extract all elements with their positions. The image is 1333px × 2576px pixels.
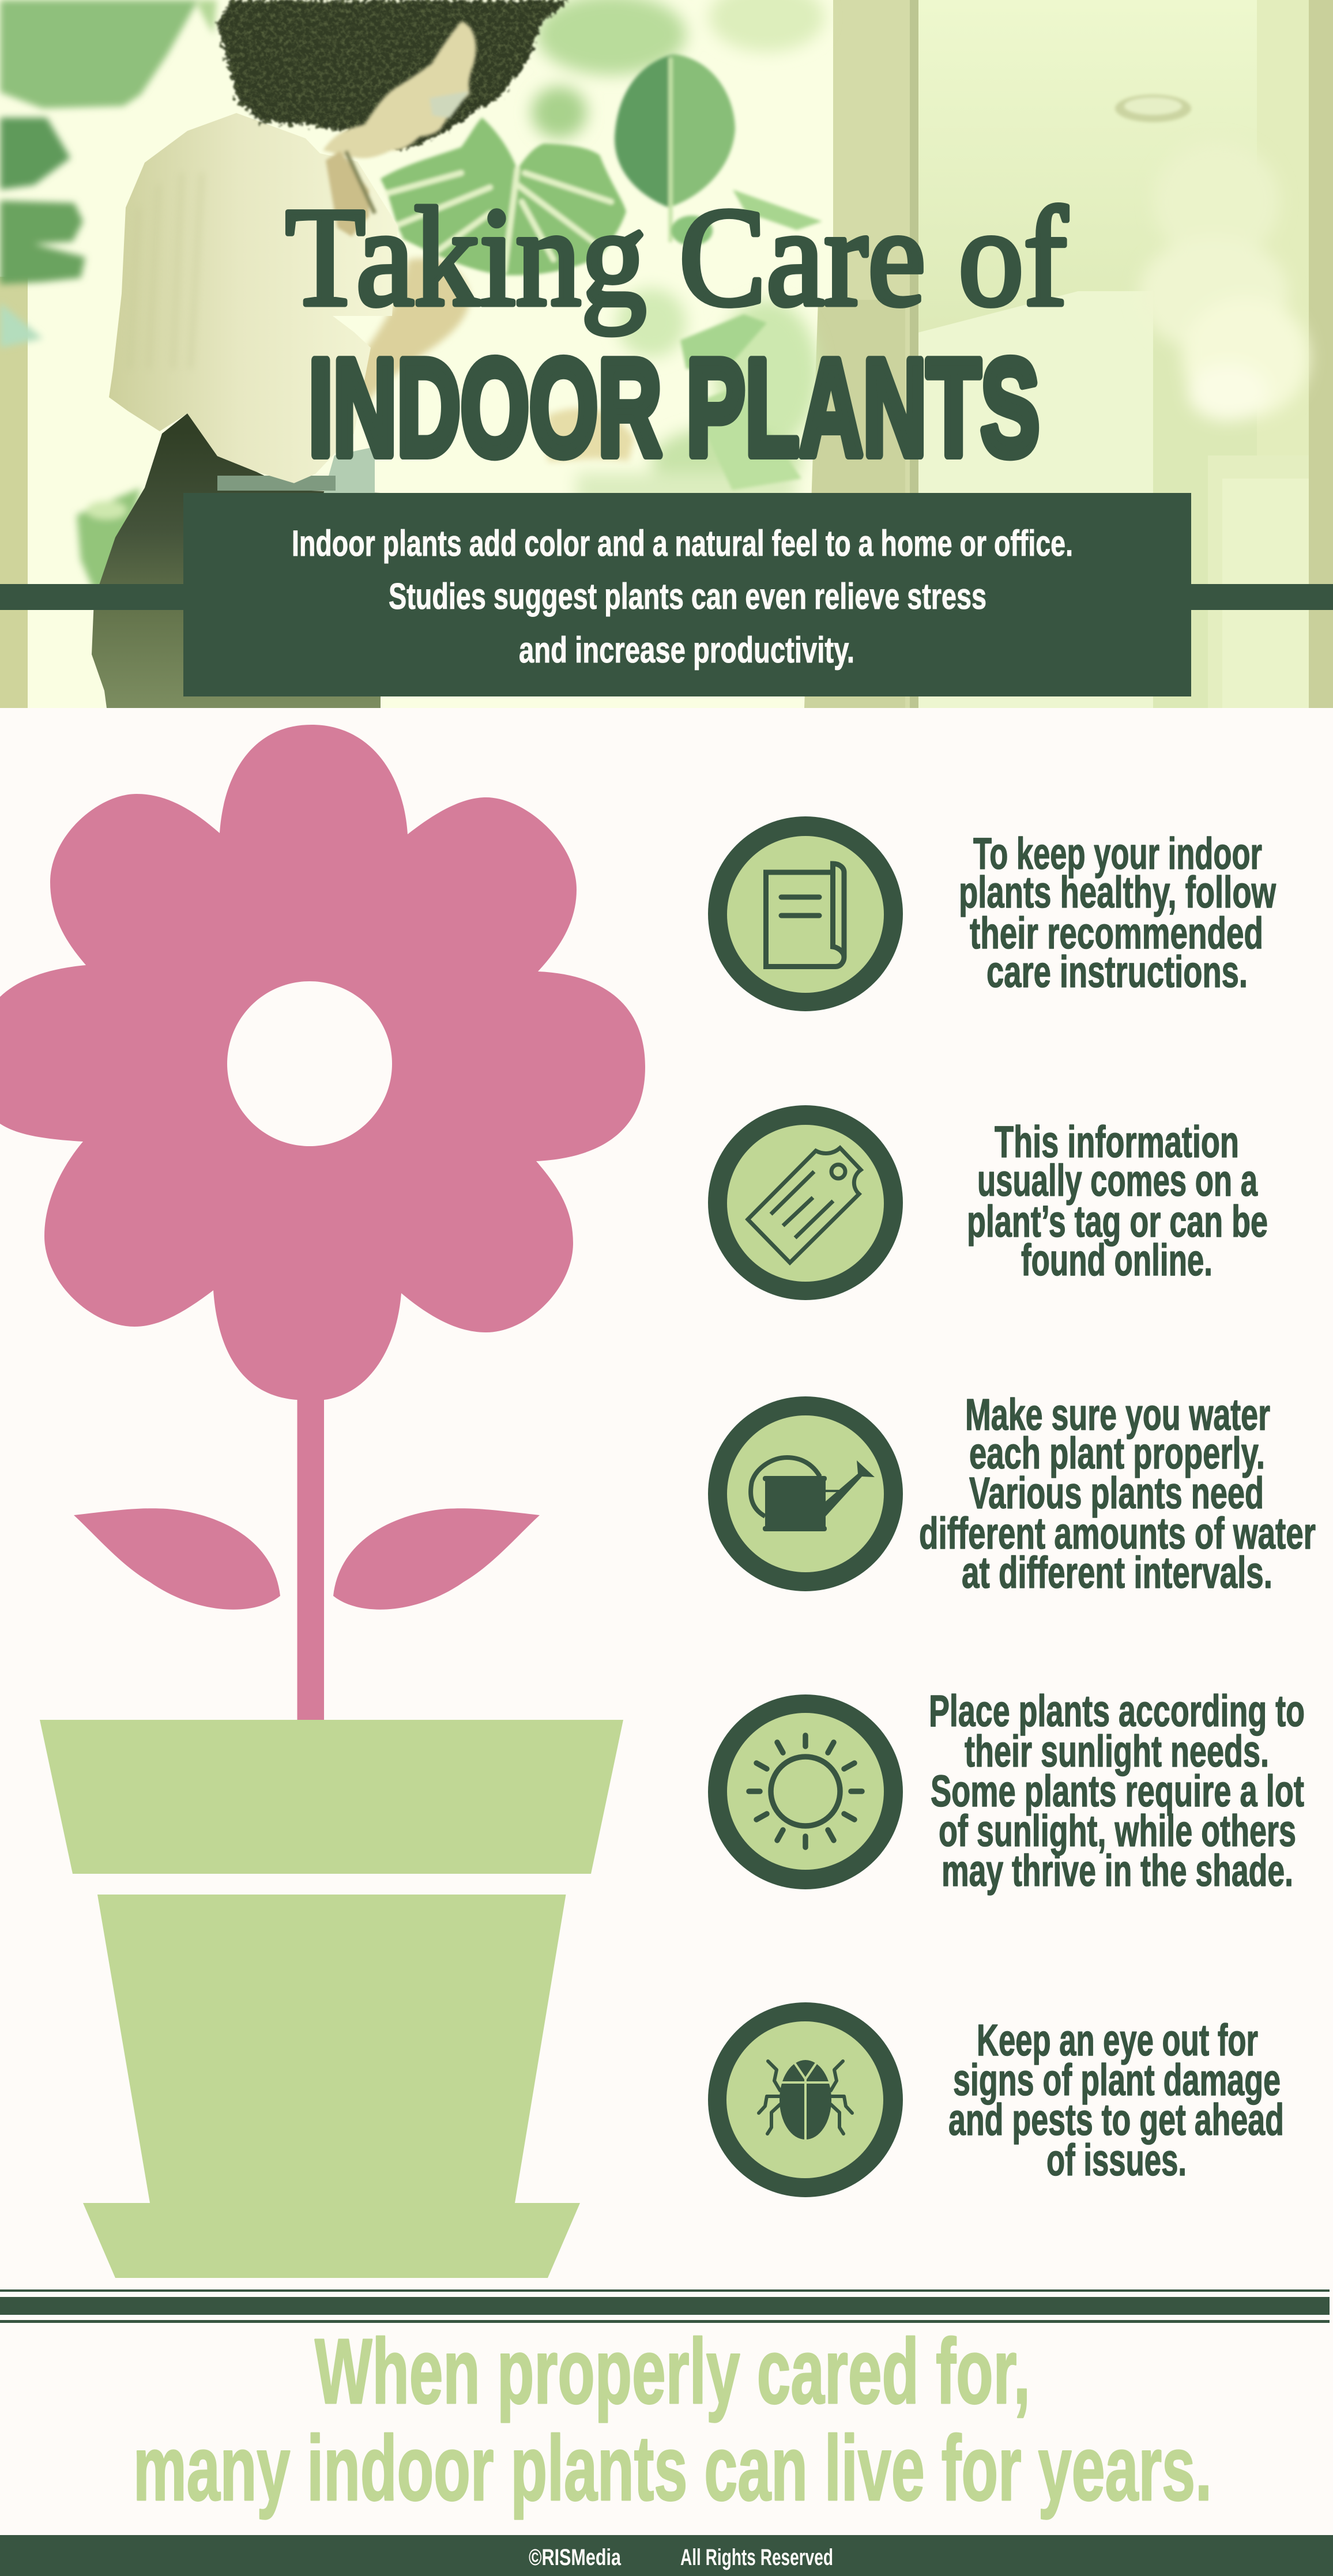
divider stripes <box>0 2289 1330 2323</box>
tip 4 text <box>929 1686 1305 1896</box>
chandelier <box>1139 141 1309 421</box>
tip 3 <box>708 1390 1316 1598</box>
pot rim <box>40 1720 623 1874</box>
blouse <box>109 113 398 483</box>
hair <box>217 0 570 150</box>
tip 2 text: This information <box>995 1117 1239 1167</box>
right leaf <box>333 1508 540 1610</box>
tip 3 text <box>919 1390 1316 1598</box>
title line: Taking Care of: Taking Care of <box>285 179 1067 335</box>
tip 2 text: found online. <box>1021 1236 1212 1285</box>
room walls and ceiling <box>0 0 1333 708</box>
icon: beetle <box>708 2002 903 2197</box>
title <box>285 179 1067 484</box>
tip 5 <box>708 2002 1284 2197</box>
pot body and saucer <box>83 1895 580 2278</box>
tip 2 text <box>967 1117 1268 1285</box>
flower head and stem <box>0 725 645 1720</box>
intro text: Indoor plants add color and a natural feel to a home or office. <box>292 524 1073 564</box>
fiddle leaf <box>615 54 822 490</box>
icon: watering can <box>708 1396 903 1591</box>
icon: sun <box>708 1694 903 1889</box>
rights text: All Rights Reserved <box>680 2545 833 2570</box>
flower illustration <box>0 725 645 2278</box>
tip 1 <box>708 816 1276 1011</box>
tip 4 <box>708 1686 1305 1896</box>
copyright: ©RISMedia <box>529 2545 622 2570</box>
tip 5 text: of issues. <box>1046 2136 1187 2185</box>
intro text <box>292 524 1073 671</box>
header band left <box>0 584 183 610</box>
header band right <box>1191 584 1333 610</box>
soft foliage backdrop <box>532 0 824 507</box>
hand and forearm <box>346 258 634 461</box>
jeans <box>92 413 381 708</box>
left window leaves <box>0 0 217 600</box>
hero photo: woman tending indoor plants <box>0 0 1333 708</box>
tip 5 text <box>948 2016 1284 2185</box>
footer bar <box>0 2535 1333 2576</box>
icon: plant tag <box>708 1105 903 1300</box>
icon: care book <box>708 816 903 1011</box>
monstera leaf <box>381 118 626 276</box>
intro text: and increase productivity. <box>519 630 854 671</box>
left leaf <box>74 1508 280 1610</box>
ceiling lamp <box>1115 95 1191 122</box>
tip 2 <box>708 1105 1268 1300</box>
closing statement <box>133 2319 1212 2519</box>
tip 1 text <box>959 829 1276 997</box>
intro text panel <box>183 493 1191 696</box>
intro text: Studies suggest plants can even relieve stress <box>389 577 986 617</box>
face and neck <box>323 21 476 236</box>
